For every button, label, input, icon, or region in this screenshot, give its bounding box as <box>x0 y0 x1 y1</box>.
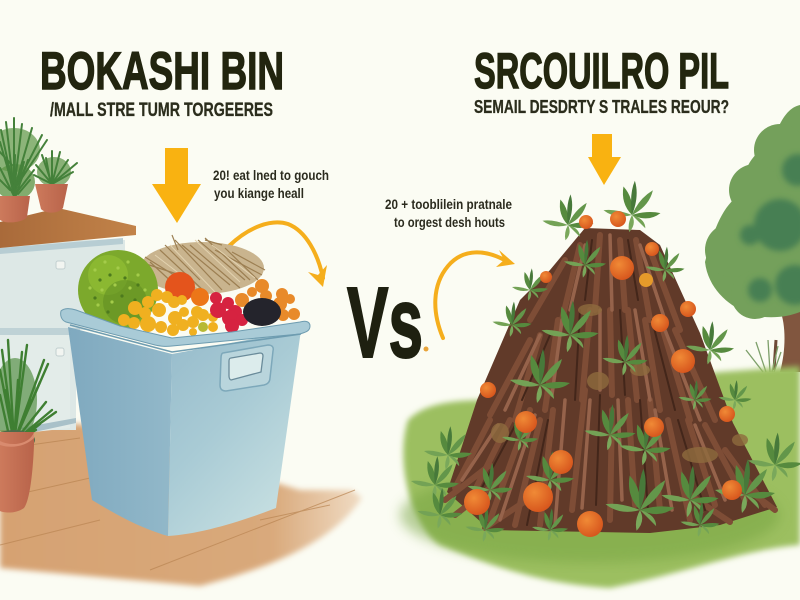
vegetation and food scraps <box>61 235 310 391</box>
bin left face <box>68 327 172 536</box>
straw <box>140 235 265 294</box>
subtitle: compost pile: SEMAIL DESDRTY S TRALES REOUR? <box>474 97 729 117</box>
lawn <box>403 366 800 588</box>
debris patches <box>491 304 748 463</box>
bin handle <box>220 345 273 391</box>
leaf clusters <box>411 181 800 542</box>
text block: pile note: to orgest desh houts <box>394 214 505 230</box>
vs label: Vs <box>347 267 423 379</box>
bin <box>61 235 310 536</box>
fruits <box>118 272 300 336</box>
cabinet <box>0 238 125 433</box>
floor <box>0 424 362 586</box>
bin right face <box>168 330 301 536</box>
text block: pile note: 20 + tooblilein pratnale <box>385 196 512 212</box>
text block: bokashi note: you kiange heall <box>214 185 304 201</box>
arrow: curved to pile <box>435 250 515 338</box>
icon: potted plant on floor <box>0 340 56 513</box>
arrow: curved to vs <box>229 222 327 287</box>
arrow: down into pile <box>588 134 621 185</box>
sticks <box>445 235 775 528</box>
tree <box>705 105 800 372</box>
arrow: down into bin <box>152 148 201 223</box>
grass tuft <box>746 340 781 372</box>
oranges <box>464 211 742 537</box>
panel: compost pile <box>385 43 800 588</box>
vs label <box>347 267 428 379</box>
title: bokashi bin: BOKASHI BIN <box>40 42 284 101</box>
floor plank lines <box>0 438 355 570</box>
lawn shade <box>400 467 780 563</box>
subtitle: bokashi bin: /MALL STRE TUMR TORGEERES <box>50 100 273 121</box>
green ball <box>78 250 158 330</box>
compost pile <box>411 181 800 542</box>
bin rim <box>61 309 310 346</box>
pile body <box>447 228 777 533</box>
wood counter <box>0 208 136 248</box>
icon: potted plants on counter <box>0 118 77 222</box>
text block: bokashi note: 20! eat lned to gouch <box>213 167 329 183</box>
